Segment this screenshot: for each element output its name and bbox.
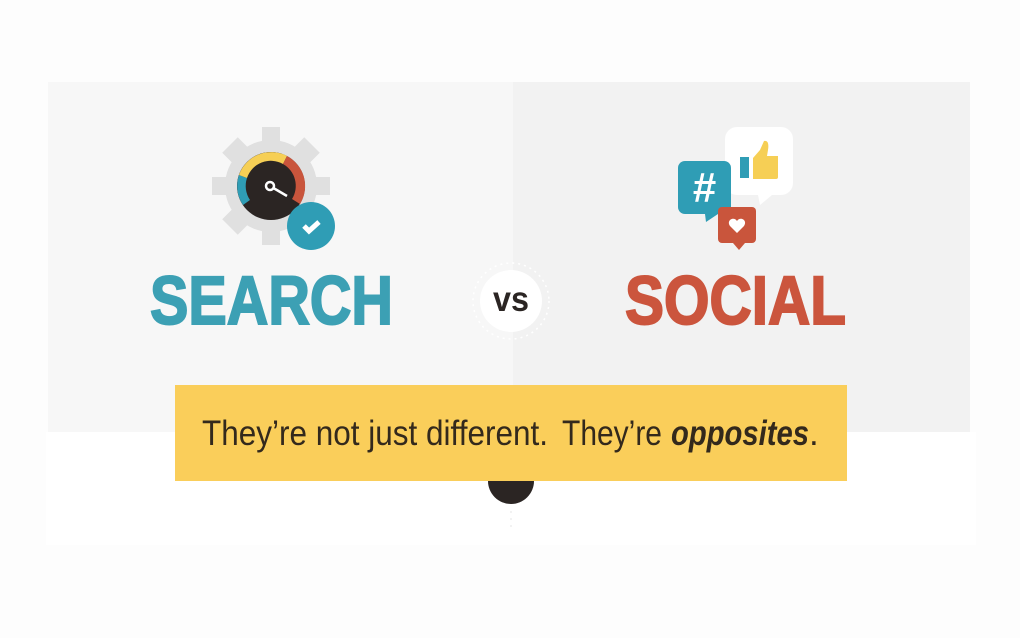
panel: social <box>513 82 970 432</box>
callout: yellow banner <box>175 385 847 481</box>
hashtag bubble: # <box>693 164 716 211</box>
heading: search: SEARCH <box>150 262 393 339</box>
callout: yellow banner: . <box>809 414 819 453</box>
icon: social speech bubbles <box>678 127 793 250</box>
callout: yellow banner: They’re not just different. <box>202 414 548 453</box>
icon: gear with speedometer and check badge <box>212 127 335 250</box>
heart bubble <box>718 207 756 250</box>
connector: half circle below callout <box>488 458 534 531</box>
vs badge: vs <box>493 280 529 319</box>
callout: yellow banner: opposites <box>671 414 809 453</box>
vs badge <box>473 263 549 339</box>
panel: search <box>48 82 513 432</box>
callout: yellow banner: They’re <box>562 414 662 453</box>
thumbs up bubble <box>725 127 793 205</box>
heading: social: SOCIAL <box>625 262 846 339</box>
